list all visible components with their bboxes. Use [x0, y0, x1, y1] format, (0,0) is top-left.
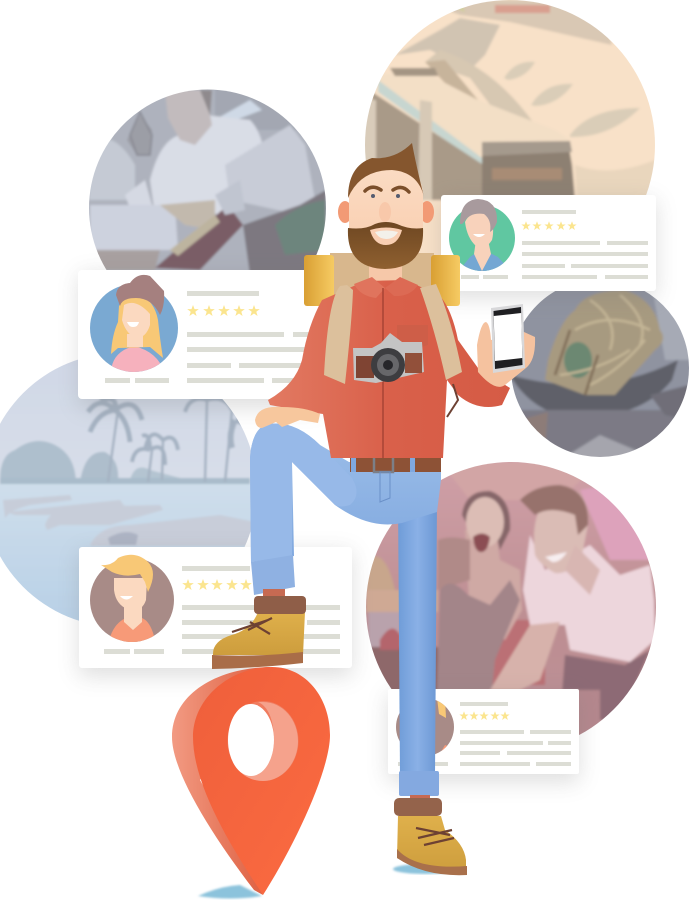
camera	[353, 333, 424, 383]
name bars and rating	[461, 210, 648, 279]
character: traveller	[212, 143, 535, 875]
avatar: man on green	[449, 199, 515, 275]
review card: woman with hat	[78, 270, 323, 408]
raised leg and boot	[212, 423, 441, 669]
photo circle: bus terminal	[365, 0, 655, 255]
avatar: woman with hat	[90, 275, 178, 380]
photo circle: noodles	[512, 291, 689, 457]
belt	[350, 454, 441, 502]
review card: blond man	[79, 547, 352, 676]
left hand on knee	[255, 407, 320, 428]
name bars and rating	[398, 702, 571, 766]
review card: man on green	[441, 195, 656, 298]
review card: bottom right	[388, 689, 579, 782]
right hand and phone	[477, 304, 535, 387]
name bars and rating	[105, 291, 320, 383]
avatar: bottom right	[396, 700, 454, 754]
shirt	[268, 280, 510, 458]
photo circle: chef	[89, 90, 326, 270]
avatar: blond man	[90, 555, 174, 645]
icon: map pin	[172, 667, 330, 898]
shoulder straps	[324, 284, 462, 417]
photo circle: casino couple	[366, 462, 656, 735]
lower leg and foot	[393, 500, 467, 875]
head	[338, 143, 434, 269]
shirt collar and placket	[354, 277, 428, 458]
neck	[369, 262, 402, 284]
name bars and rating	[104, 566, 340, 654]
photo circle: resort pool	[0, 360, 251, 621]
backpack bedroll	[304, 253, 460, 306]
